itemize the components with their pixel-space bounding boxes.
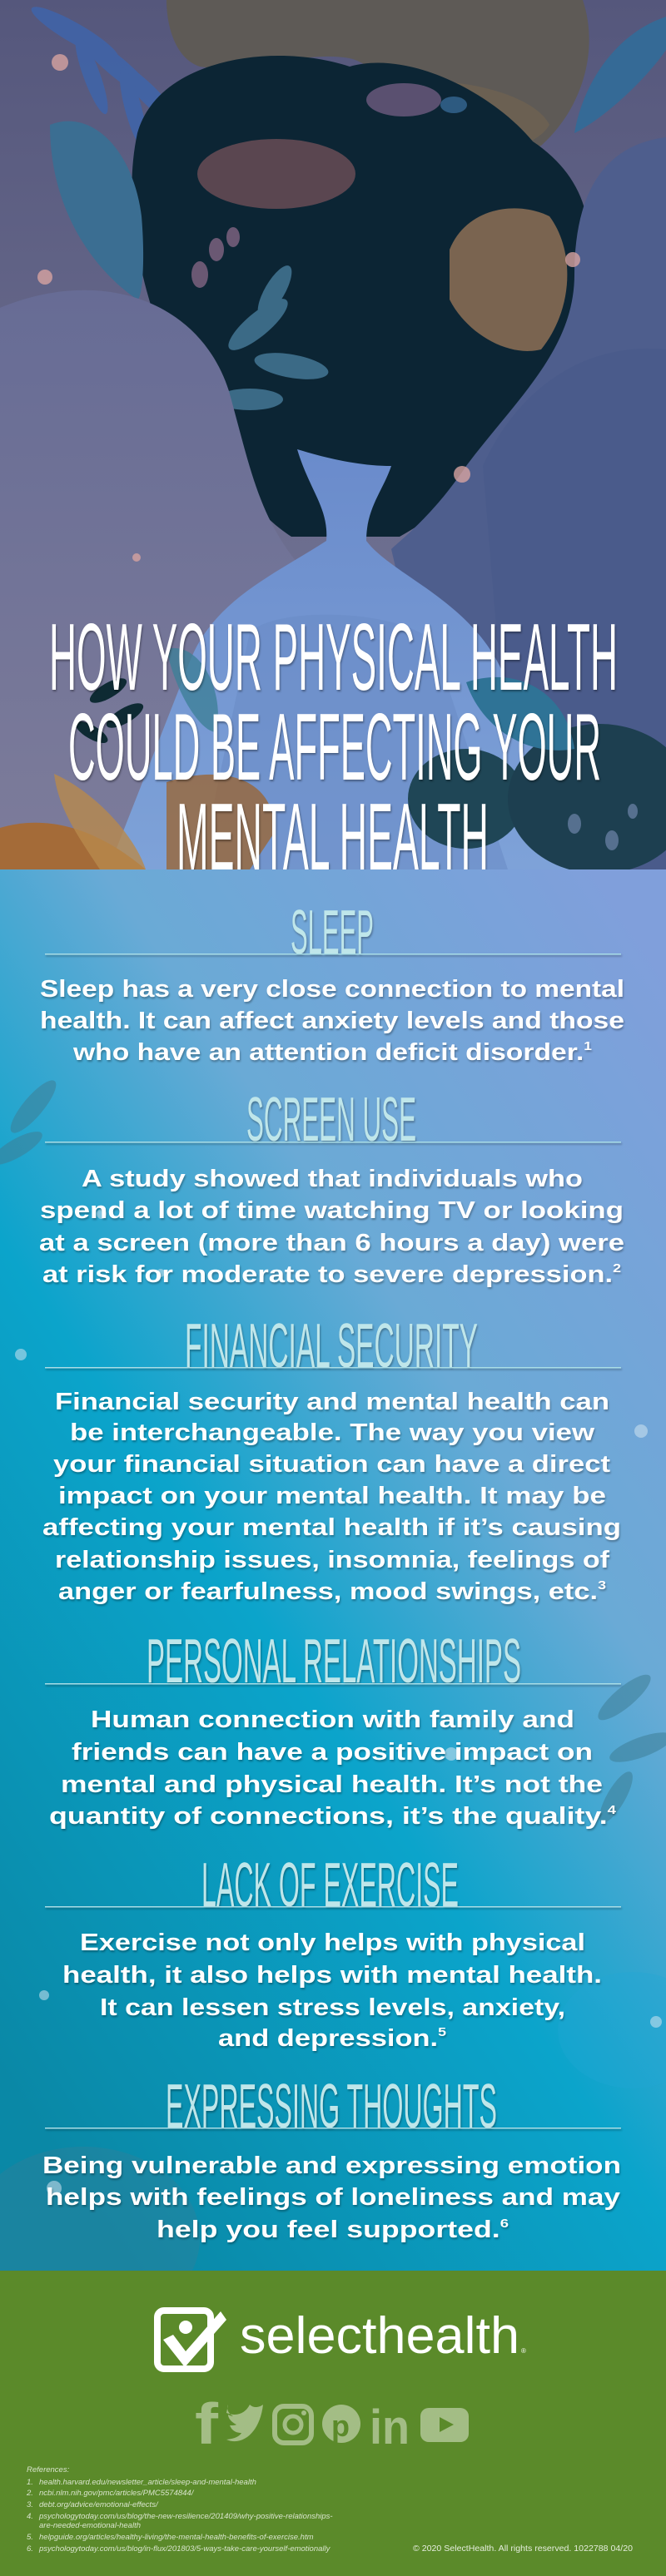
bottom right leaves [408,749,524,849]
section: expressing thoughts [42,2071,621,2243]
social icons: f [195,2391,219,2456]
monstera [450,208,567,351]
section: sleep: who have an attention deficit disorder. [73,1039,514,1066]
section: financial security: relationship issues, insomnia, feelings of [55,1547,609,1573]
section: personal relationships: Human connection with family and [91,1707,574,1733]
references: helpguide.org/articles/healthy-living/the-mental-health-benefits-of-exercise.htm [39,2533,314,2542]
references: 6. [27,2544,33,2554]
panel: hero illustration [0,0,666,869]
title [49,605,618,890]
panel: content sections [0,869,666,2271]
section: lack of exercise: It can lessen stress levels, anxiety, [100,1994,565,2021]
logo: ® [521,2347,526,2355]
section: expressing thoughts: Being vulnerable and expressing emotion [42,2152,621,2179]
references: 4. [27,2512,33,2521]
section: screen use: spend a lot of time watching TV or looking [40,1197,624,1224]
references: 3. [27,2500,33,2509]
section: screen use [39,1084,624,1288]
references: 5. [27,2533,33,2542]
body silhouette [108,449,591,869]
section: financial security [42,1310,621,1605]
references: 2. [26,2489,33,2498]
section: screen use: at risk for moderate to severe depression. [42,1261,523,1288]
section: lack of exercise: health, it also helps with mental health. [62,1962,602,1989]
section: expressing thoughts: 6 [500,2217,509,2231]
section: sleep: 1 [584,1039,592,1053]
references: References: [27,2465,70,2474]
dots [37,54,580,562]
section: screen use: SCREEN USE [246,1084,416,1154]
section: screen use: at a screen (more than 6 hours a day) were [39,1230,624,1256]
references: ncbi.nlm.nih.gov/pmc/articles/PMC5574844/ [39,2489,195,2498]
section: screen use: 2 [613,1261,621,1276]
hair [132,56,589,537]
section: sleep [40,897,624,1066]
section: sleep: Sleep has a very close connection to mental [40,976,624,1003]
bottom left plants [0,823,146,869]
section: expressing thoughts: help you feel supported. [157,2217,435,2243]
section: lack of exercise [45,1850,621,2052]
section: lack of exercise: 5 [438,2025,446,2039]
section: financial security: affecting your mental health if it’s causing [42,1514,621,1541]
left hill [0,290,300,869]
section: sleep: SLEEP [291,897,374,967]
left banana leaf [50,121,143,300]
references: psychologytoday.com/us/blog/in-flux/201803/5-ways-take-care-yourself-emotionally [38,2544,331,2554]
references [26,2465,333,2554]
references: psychologytoday.com/us/blog/the-new-resilience/201409/why-positive-relationships- [38,2512,333,2521]
section: financial security: Financial security and mental health can [55,1389,609,1415]
section: financial security: your financial situation can have a direct [53,1451,610,1478]
section: financial security: be interchangeable. The way you view [70,1419,595,1446]
logo: selecthealth [240,2307,519,2365]
right top banana leaf [574,17,666,133]
references: are-needed-emotional-health [39,2521,141,2530]
references: 1. [27,2478,33,2487]
social icons: in [370,2400,410,2455]
copyright: © 2020 SelectHealth. All rights reserved. 1022788 04/20 [413,2544,633,2554]
logo [157,2307,526,2369]
section: expressing thoughts: helps with feelings of loneliness and may [46,2184,620,2211]
references: debt.org/advice/emotional-effects/ [39,2500,159,2509]
section: screen use: A study showed that individuals who [82,1166,583,1192]
section: personal relationships [45,1626,621,1830]
right hill [391,137,666,869]
icon: checkbox [157,2311,226,2369]
references: health.harvard.edu/newsletter_article/sleep-and-mental-health [39,2478,256,2487]
section: personal relationships: friends can have a positive impact on [72,1739,593,1766]
section: lack of exercise: and depression. [218,2025,403,2052]
section: financial security: impact on your mental health. It may be [58,1483,606,1509]
decorative leaves [0,1075,666,2330]
section: personal relationships: mental and physical health. It’s not the [61,1771,603,1798]
section: financial security: 3 [598,1578,606,1593]
top left fern [27,0,189,151]
section: lack of exercise: Exercise not only helps with physical [80,1930,585,1956]
teal leaves [216,261,331,410]
panel: footer [0,2271,666,2576]
section: personal relationships: quantity of connections, it’s the quality. [49,1803,501,1830]
section: personal relationships: 4 [608,1803,617,1817]
social icons: p [331,2409,350,2443]
section: sleep: health. It can affect anxiety levels and those [40,1008,624,1034]
section: financial security: anger or fearfulness, mood swings, etc. [58,1578,513,1605]
top brown blob [166,0,589,156]
social icons [195,2391,469,2456]
